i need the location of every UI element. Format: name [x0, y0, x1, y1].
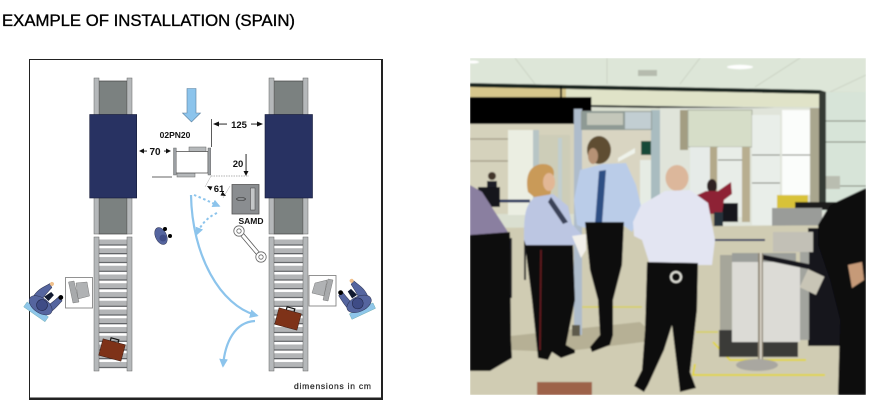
brown floor tile: [537, 382, 592, 395]
arrow: passenger exit path: [223, 321, 255, 366]
ceiling lights and vent: [467, 58, 866, 92]
stanchion: [736, 253, 825, 371]
dark machine behind right officer: [808, 228, 842, 346]
officer on left edge: [470, 185, 512, 371]
label: SAMD: SAMD: [238, 216, 264, 226]
officer on right edge: [818, 188, 866, 395]
right operator: [334, 275, 376, 320]
arrow: dotted return path: [197, 213, 217, 234]
icon: walk-through metal detector: [174, 147, 211, 177]
right column: [824, 174, 864, 212]
dimension: 70: [139, 147, 171, 158]
walk-through detector: [572, 109, 660, 336]
right tray table: [309, 276, 336, 306]
scanner cabinet: [719, 232, 813, 357]
ceiling: [592, 84, 819, 89]
distant wall right: [660, 108, 825, 238]
yellow bin and dark equipment: [721, 194, 837, 226]
icon: SAMD unit: [232, 184, 259, 214]
icon: barrier post: [234, 226, 266, 262]
female officer: [524, 164, 586, 360]
black beam: [470, 83, 826, 94]
black sign: [470, 97, 592, 124]
dimension: 20: 20: [233, 159, 243, 170]
distant wall left: [470, 124, 574, 214]
background person at desk: [478, 172, 500, 207]
right X-ray conveyor: [265, 78, 312, 371]
arrow: main passenger path: [191, 195, 257, 316]
icon: walking passenger: [152, 226, 172, 246]
dimension: 125: [211, 119, 263, 147]
floor: [470, 225, 866, 395]
dimension: 61: 61: [214, 184, 225, 195]
photo background: [496, 90, 850, 228]
left X-ray conveyor: [90, 78, 137, 371]
icon: suitcase on right conveyor: [275, 305, 302, 330]
officer with back to camera: [633, 165, 715, 392]
male officer with tie: [574, 136, 642, 352]
title: EXAMPLE OF INSTALLATION (SPAIN): [2, 12, 295, 30]
queue belt and posts: [500, 201, 765, 298]
icon: suitcase on left conveyor: [99, 336, 126, 361]
dimension: 61: [205, 176, 230, 198]
arrow: dotted path to SAMD: [194, 195, 219, 206]
label: 02PN20: 02PN20: [160, 130, 191, 140]
note: dimensions in cm: dimensions in cm: [294, 381, 371, 391]
panel: photo of installed checkpoint: [467, 58, 866, 395]
yellow floor lines: [580, 307, 825, 375]
dimension: 125: 125: [231, 120, 248, 131]
background passenger in red: [696, 178, 733, 228]
arrow: passenger flow direction: [182, 88, 200, 122]
dimension: 70: 70: [149, 147, 161, 158]
distant wall centre: [582, 130, 651, 196]
upper wall band: [470, 86, 566, 98]
left tray table: [66, 278, 92, 308]
left operator: [24, 277, 68, 323]
panel: floor plan diagram: [24, 59, 382, 399]
plan frame: [29, 59, 382, 399]
dimension: 20: [152, 154, 249, 194]
